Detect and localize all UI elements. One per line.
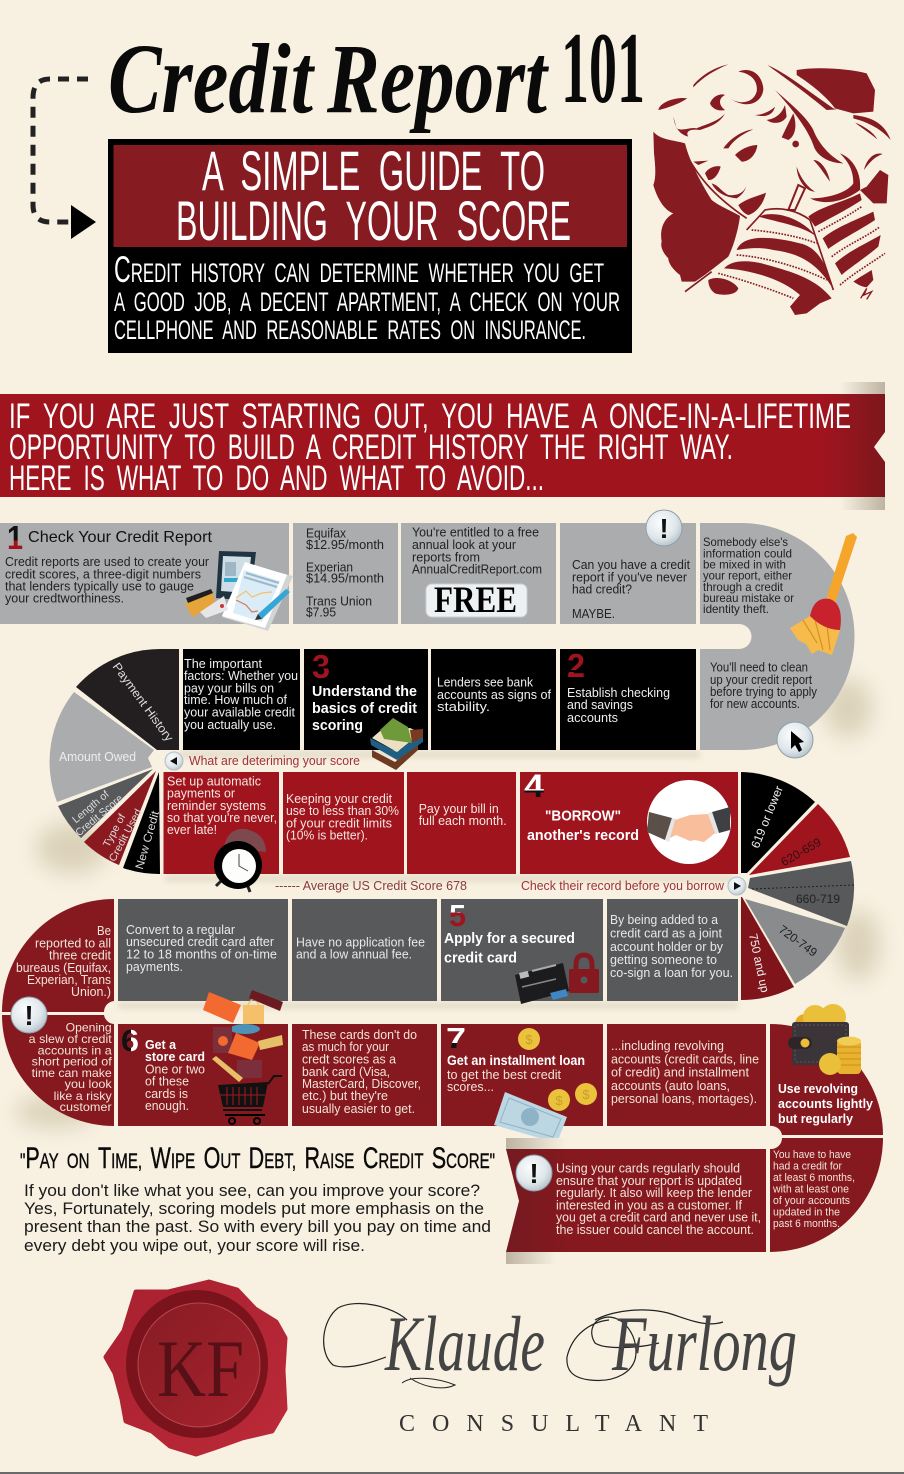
mix-up text: bureau mistake or: [703, 592, 794, 605]
improve score text: every debt you wipe out, your score will rise.: [24, 1236, 365, 1255]
board shadows: [15, 678, 880, 1128]
curve: use revolving accounts: accounts lightly: [778, 1096, 874, 1111]
panel: easier to get: bank card (Visa,: [302, 1065, 390, 1079]
number 5: 5: [449, 898, 466, 933]
slice: 720-749: [745, 899, 845, 984]
improve score text: If you don't like what you see, can you improve your score?: [24, 1181, 480, 1200]
panel: joint account: credit card as a joint: [610, 926, 722, 941]
panel: bureau prices: [293, 523, 398, 624]
panel: credit use: [283, 772, 404, 874]
icon: handshake: [647, 780, 731, 864]
panel: borrow a record: [520, 768, 738, 874]
panel: understand basics: Understand the: [312, 683, 417, 700]
banner text: [9, 397, 851, 498]
row 3: payments and borrowing: [164, 768, 738, 874]
panel: store card: enough.: [145, 1099, 189, 1113]
mix-up text: through a credit: [703, 581, 784, 594]
curve: credit bureaus: Union.): [71, 985, 111, 999]
icon: broom: [790, 533, 857, 655]
title: [108, 12, 645, 134]
panel: revolving accounts: [607, 1024, 766, 1126]
panel: borrow a record: "BORROW": [545, 808, 621, 825]
panel: pay in full: Pay your bill in: [419, 802, 499, 816]
subtitle panel: [114, 139, 627, 252]
curve: use revolving accounts: Use revolving: [778, 1081, 858, 1096]
panel: installment loan: [441, 1023, 603, 1126]
intro text: [114, 249, 620, 345]
clean-up text: You'll need to clean: [710, 661, 808, 675]
panel: secured card: Apply for a secured: [444, 930, 575, 947]
pie chart: score factors: [50, 649, 179, 874]
caption: check record: Check their record before you borrow: [521, 879, 725, 893]
panel: free report: AnnualCreditReport.com: [412, 563, 542, 577]
number 3: 3: [312, 648, 330, 685]
panel: maybe: MAYBE.: [572, 607, 615, 621]
header box: [108, 139, 632, 353]
panel: bureau prices: $14.95/month: [306, 571, 384, 586]
panel: credit use: of your credit limits: [286, 817, 392, 831]
curve: risky customer: [2, 1015, 114, 1126]
slice: payment history: Payment History: [110, 660, 176, 744]
curve: credit bureaus: Be: [97, 924, 111, 938]
wax seal: KF: [157, 1323, 244, 1414]
slice: payment history: [76, 649, 179, 750]
step text: Credit reports are used to create your: [5, 555, 209, 569]
curve: credit bureaus: Experian, Trans: [27, 973, 111, 987]
step text: your credtworthiness.: [5, 592, 124, 606]
panel: checking and savings: and savings: [567, 698, 633, 712]
caption: score factors: What are deteriming your score: [189, 754, 360, 768]
panel: bank accounts: accounts as signs of: [437, 688, 552, 702]
illustration: woman: [653, 64, 891, 315]
panel: installment loan: Get an installment loan: [447, 1053, 585, 1068]
curve: risky customer: Opening: [66, 1021, 112, 1035]
panel: checking and savings: [560, 647, 696, 750]
panel: free report: You're entitled to a free: [412, 526, 539, 540]
panel: low fee: Have no application fee: [296, 936, 425, 950]
icon: padlock: [569, 955, 599, 993]
panel: easier to get: credt scores as a: [302, 1053, 396, 1067]
slice: new credit: [123, 772, 162, 874]
curve: credit bureaus: [2, 899, 114, 1012]
panel: credit use: (10% is better).: [286, 829, 368, 843]
slice: amount owed: [50, 692, 154, 802]
curve: six months: with at least one: [772, 1184, 849, 1196]
mix-up text: information could: [703, 548, 792, 560]
panel: understand basics: scoring: [312, 717, 363, 734]
panel: important factors: [183, 649, 300, 750]
curve: credit bureaus: bureaus (Equifax,: [16, 961, 111, 975]
row 4: secured card: [2, 898, 738, 1012]
curve: credit bureaus: three credit: [49, 949, 112, 963]
panel: automatic payments: Set up automatic: [167, 775, 261, 789]
panel: checking and savings: accounts: [567, 711, 618, 725]
curve: risky customer: a slew of credit: [29, 1032, 112, 1046]
curve: use revolving accounts: [770, 1024, 883, 1135]
panel: pay in full: [407, 772, 516, 874]
slice: amount owed: Amount Owed: [59, 750, 136, 764]
title: 101: [561, 12, 645, 125]
panel: bureau prices: Equifax: [306, 526, 346, 541]
panel: bank accounts: stability.: [437, 700, 490, 714]
title: Report: [326, 23, 550, 134]
panel: revolving accounts: accounts (auto loans,: [611, 1078, 730, 1093]
quote heading: "PAY ON TIME, WIPE OUT DEBT, RAISE CREDIT SCORE": [20, 1142, 495, 1175]
panel: free report: reports from: [412, 551, 480, 565]
slice: length of credit score: Length of: [70, 788, 112, 826]
curve: risky customer: short period of: [32, 1055, 112, 1069]
panel: borrow a record: another's record: [527, 827, 639, 844]
pie chart: score ranges: [741, 772, 854, 1000]
improve score text: [24, 1181, 491, 1255]
icon: alert badge: !: [659, 513, 669, 544]
signature: Klaude Furlong: Klaude: [384, 1300, 545, 1387]
panel: easier to get: MasterCard, Discover,: [302, 1077, 421, 1091]
curve: risky customer: customer: [60, 1100, 112, 1114]
panel: low fee: and a low annual fee.: [296, 948, 412, 962]
panel: easier to get: etc.) but they're: [302, 1089, 388, 1103]
slice: 720-749: 720-749: [776, 922, 820, 960]
clean-up text: up your credit report: [710, 673, 812, 687]
row 5: store card and loans: [2, 997, 883, 1135]
curve: six months: [770, 1138, 883, 1252]
slice: type of credit used: Type of: [101, 812, 128, 849]
curve: clean up your report: [700, 523, 857, 758]
number 6: 6: [121, 1023, 139, 1058]
mix-up text: be mixed in with: [703, 558, 786, 572]
panel: revolving accounts: accounts (credit cards, line: [611, 1052, 759, 1067]
panel: joint account: co-sign a loan for you.: [610, 965, 733, 980]
panel: important factors: your available credit: [184, 706, 296, 720]
panel: easier to get: as much for your: [302, 1040, 389, 1054]
icon: alarm clock: [214, 829, 266, 892]
mix-up text: identity theft.: [703, 603, 769, 616]
panel: convert card: unsecured credit card after: [126, 935, 274, 949]
panel: store card: of these: [145, 1075, 189, 1089]
panel: joint account: getting someone to: [610, 952, 717, 967]
curve: six months: had a credit for: [773, 1161, 842, 1173]
curve: six months: updated in the: [773, 1207, 840, 1219]
panel: credit use: Keeping your credit: [286, 792, 393, 806]
mix-up text: Somebody else's: [703, 536, 788, 549]
signature: Klaude Furlong: [324, 1300, 797, 1388]
free button: FREE: [434, 580, 517, 621]
panel: maybe: had credit?: [572, 583, 632, 597]
dashed arrow: [33, 79, 96, 239]
icon: left arrow badge: [165, 752, 183, 770]
panel: use cards regularly: regularly. It also will keep the lender: [556, 1186, 752, 1200]
panel: bureau prices: Experian: [306, 560, 353, 575]
panel: easier to get: usually easier to get.: [302, 1102, 415, 1116]
panel: bank accounts: Lenders see bank: [437, 676, 534, 690]
panel: easier to get: [292, 1024, 437, 1126]
panel: understand basics: [304, 648, 428, 770]
panel: checking and savings: Establish checking: [567, 686, 670, 700]
number 1: 1: [7, 519, 23, 556]
panel: installment loan: to get the best credit: [447, 1068, 562, 1082]
slice: 750 and up: 750 and up: [746, 932, 772, 994]
caption: average score: ------ Average US Credit Score 678: [275, 879, 467, 893]
curve: risky customer: time can make: [32, 1066, 112, 1080]
panel: low fee: [292, 899, 437, 1001]
icon: cursor badge: [777, 722, 813, 758]
clean-up text: [710, 661, 818, 711]
icon: right arrow badge: [728, 877, 746, 895]
panel: free report: annual look at your: [412, 538, 516, 552]
number 7: 7: [446, 1023, 466, 1055]
consultant label: CONSULTANT: [399, 1411, 708, 1437]
slice: 620-659: 620-659: [778, 835, 824, 869]
panel: joint account: account holder or by: [610, 939, 723, 954]
panel: convert card: Convert to a regular: [126, 923, 235, 937]
panel: important factors: time. How much of: [184, 693, 288, 707]
panel: bureau prices: $12.95/month: [306, 537, 384, 552]
step text: credit scores, a three-digit numbers: [5, 568, 201, 582]
slice: length of credit score: [58, 769, 153, 839]
panel: store card: Get a: [145, 1038, 177, 1052]
icon: coins and banknote: $: [555, 1093, 563, 1108]
mix-up text: [703, 536, 794, 616]
curve: risky customer: accounts in a: [38, 1044, 112, 1058]
icon: alert badge: [516, 1155, 552, 1191]
panel: store card: [118, 1023, 288, 1126]
panel: use cards regularly: interested in you as a customer. If: [556, 1199, 743, 1213]
panel: joint account: [607, 899, 738, 1001]
panel: convert card: 12 to 18 months of on-time: [126, 948, 277, 962]
panel: automatic payments: [164, 772, 279, 874]
caption: score factors: [165, 752, 360, 770]
curve: six months: You have to have: [773, 1149, 851, 1161]
cart: [218, 1076, 282, 1124]
number 2: 2: [567, 647, 585, 684]
signature: Klaude Furlong: Furlong: [611, 1300, 797, 1387]
panel: joint account: By being added to a: [610, 912, 719, 927]
panel: convert card: payments.: [126, 960, 183, 974]
panel: understand basics: basics of credit: [312, 700, 417, 717]
panel: automatic payments: payments or: [167, 787, 235, 801]
curve: credit bureaus: reported to all: [35, 937, 111, 951]
curve: use revolving accounts: but regularly: [778, 1111, 854, 1126]
panel: use cards regularly: Using your cards regularly should: [556, 1162, 740, 1176]
panel: convert card: [118, 899, 288, 1001]
panel: use cards regularly: [506, 1138, 766, 1264]
icon: documents, card and pencil: [185, 551, 293, 631]
curve: risky customer: you look: [65, 1077, 113, 1091]
title: Credit: [108, 23, 316, 134]
panel: maybe: Can you have a credit: [572, 558, 691, 572]
panel: credit use: use to less than 30%: [286, 804, 399, 818]
slice: type of credit used: Credit Used: [107, 807, 145, 864]
step heading: Check Your Credit Report: [28, 529, 213, 546]
curve: six months: at least 6 months,: [773, 1172, 855, 1184]
slice: 750 and up: [741, 897, 794, 1000]
panel: important factors: you actually use.: [184, 718, 276, 732]
icon: alert badge: !: [24, 1000, 34, 1031]
icon: coins and banknote: $: [525, 1032, 533, 1047]
slice: type of credit used: [84, 771, 156, 865]
slice: 620-659: [749, 804, 850, 875]
icon: alert badge: [11, 997, 47, 1033]
panel: revolving accounts: personal loans, mortages).: [611, 1091, 757, 1106]
panel: important factors: factors: Whether you: [184, 669, 298, 683]
mix-up text: your report, either: [703, 570, 792, 582]
panel: automatic payments: ever late!: [167, 823, 217, 837]
panel: installment loan: scores...: [447, 1080, 494, 1094]
panel: store card: cards is: [145, 1087, 188, 1101]
panel: revolving accounts: ...including revolving: [611, 1038, 724, 1053]
improve score text: present than the past. So with every bill you pay on time and: [24, 1217, 491, 1236]
improve score text: Yes, Fortunately, scoring models put more emphasis on the: [24, 1199, 484, 1218]
intro text: CREDIT HISTORY CAN DETERMINE WHETHER YOU GET: [114, 249, 604, 290]
panel: secured card: credit card: [444, 950, 517, 967]
intro text: CELLPHONE AND REASONABLE RATES ON INSURANCE.: [114, 315, 586, 345]
panel: easier to get: These cards don't do: [302, 1028, 417, 1042]
slice: 660-719: 660-719: [796, 892, 840, 906]
panel: check your credit report: [0, 519, 293, 631]
icon: credit card: [515, 963, 569, 1004]
panel: secured card: [441, 898, 603, 1004]
slice: 660-719: [748, 861, 854, 926]
wax seal: [106, 1282, 285, 1454]
panel: use cards regularly: ensure that your report is updated: [556, 1174, 742, 1188]
panel: automatic payments: reminder systems: [167, 799, 266, 813]
subtitle panel: BUILDING YOUR SCORE: [176, 189, 571, 252]
panel: automatic payments: so that you're never,: [167, 811, 277, 825]
panel: use cards regularly: you get a credit card and never use it,: [556, 1211, 761, 1225]
panel: revolving accounts: of credit) and installment: [611, 1065, 749, 1080]
slice: 619 or lower: [741, 772, 815, 873]
panel: bureau prices: $7.95: [306, 605, 336, 620]
step text: that lenders typically use to gauge: [5, 580, 194, 594]
slice: length of credit score: Credit Score: [73, 792, 125, 839]
row 1: check your report: [0, 510, 696, 631]
step text: [5, 555, 209, 606]
icon: coins and banknote: [494, 1028, 597, 1143]
banner text: HERE IS WHAT TO DO AND WHAT TO AVOID...: [9, 459, 544, 498]
subtitle panel: A SIMPLE GUIDE TO: [202, 139, 545, 202]
panel: store card: store card: [145, 1050, 205, 1064]
panel: free report: [401, 523, 556, 624]
icon: wallet and coins: [788, 1004, 861, 1075]
panel: bank accounts: [431, 649, 556, 750]
panel: important factors: pay your bills on: [184, 682, 274, 696]
clean-up text: for new accounts.: [710, 697, 800, 711]
panel: important factors: The important: [184, 657, 263, 671]
panel: maybe: [560, 510, 696, 624]
panel: maybe: report if you've never: [572, 571, 687, 585]
panel: store card: One or two: [145, 1063, 205, 1077]
banner: [0, 382, 885, 510]
slice: new credit: New Credit: [134, 809, 162, 871]
curve: six months: of your accounts: [773, 1195, 850, 1207]
number 4: 4: [524, 768, 544, 804]
row 2: credit scoring: [183, 647, 696, 770]
panel: use cards regularly: the issuer could cancel the account.: [556, 1223, 754, 1237]
curve: six months: past 6 months.: [773, 1218, 840, 1230]
icon: alert badge: !: [529, 1158, 539, 1189]
icon: books: [370, 718, 423, 770]
clean-up text: before trying to apply: [710, 685, 818, 699]
panel: bureau prices: Trans Union: [306, 594, 372, 609]
icon: shopping cart and goods: [203, 990, 283, 1124]
curve: risky customer: like a risky: [54, 1089, 112, 1103]
panel: pay in full: full each month.: [419, 814, 507, 828]
slice: 619 or lower: 619 or lower: [748, 784, 786, 850]
icon: coins and banknote: $: [582, 1087, 590, 1102]
